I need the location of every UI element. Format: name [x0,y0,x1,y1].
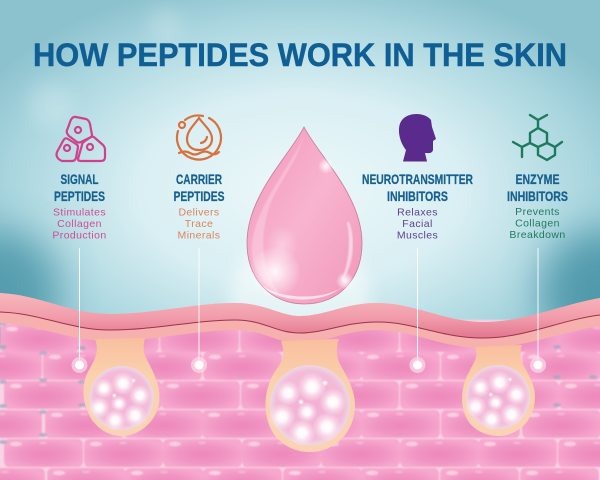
panel: neurotransmitter inhibitors [362,114,473,242]
icon: mineral droplet [177,115,221,160]
heading: signal peptides: PEPTIDES [54,188,105,204]
description: enzyme inhibitors: Breakdown [509,229,566,241]
icon: human head [399,114,436,162]
description: signal peptides: Collagen [57,218,102,230]
panel: enzyme inhibitors [507,115,568,241]
pointer: carrier peptides [191,248,207,373]
pore follicle: left [83,338,160,436]
heading: neurotransmitter inhibitors: INHIBITORS [387,188,448,204]
heading: neurotransmitter inhibitors: NEUROTRANSMITTER [362,171,473,187]
description: signal peptides: Stimulates [53,206,106,218]
pore follicle: centre [266,339,355,452]
description: neurotransmitter inhibitors: Facial [402,218,433,230]
heading: enzyme inhibitors: ENZYME [516,171,560,187]
panel: skin surface band [0,293,600,348]
description: carrier peptides: Minerals [178,230,220,242]
heading: enzyme inhibitors: INHIBITORS [507,188,568,204]
description: neurotransmitter inhibitors: Relaxes [397,206,438,218]
description: carrier peptides: Trace [185,218,213,230]
description: enzyme inhibitors: Collagen [515,218,560,230]
description: neurotransmitter inhibitors: Muscles [397,230,438,242]
description: signal peptides: Production [52,230,107,242]
icon: molecule [513,115,562,160]
heading: carrier peptides: PEPTIDES [174,188,224,204]
description: enzyme inhibitors: Prevents [515,206,560,218]
heading: signal peptides: SIGNAL [60,171,99,187]
panel: skin cell layer [0,320,600,480]
panel: carrier peptides [174,115,224,242]
pointer: signal peptides [72,248,88,373]
description: carrier peptides: Delivers [178,206,220,218]
background: pale teal gradient sky [0,0,600,370]
icon: cells [57,117,105,161]
water drop serum [247,127,362,304]
pointer: neurotransmitter inhibitors [410,248,426,373]
heading: carrier peptides: CARRIER [176,171,222,187]
pointer: enzyme inhibitors [530,248,546,373]
title: HOW PEPTIDES WORK IN THE SKIN [33,37,567,73]
pore follicle: right [462,345,535,436]
panel: signal peptides [52,117,107,242]
